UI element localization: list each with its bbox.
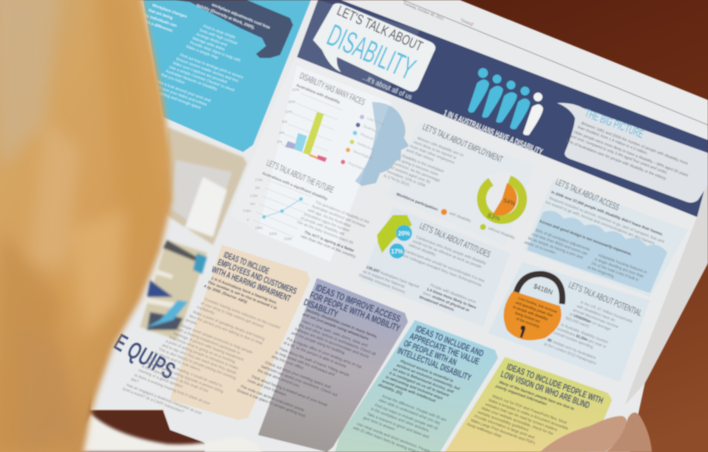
hearing panel body: 4 by 2050. (Source: ABS)	[202, 283, 249, 305]
intellectual panel tips: often able to understand what you say.	[378, 397, 442, 426]
employment text: Women with disability are no	[417, 135, 465, 158]
masthead date line: Tuesday, October 30, 2012	[403, 1, 444, 21]
future panel text: with age. As the Australian	[307, 207, 352, 228]
line chart: 0	[247, 218, 249, 222]
chart legend: Low Vision	[367, 116, 384, 126]
bar chart	[277, 88, 342, 162]
panel: intellectual disability ideas	[335, 320, 498, 452]
icon: face silhouette	[355, 102, 409, 186]
mobility panel tips: lifts and other options to workstations. Check all	[298, 322, 377, 356]
potential text: contributes $1.5bn per year or	[557, 326, 607, 349]
hearing panel tips: site?	[130, 376, 140, 384]
hearing panel tips: with a hearing impairment participate in	[176, 326, 241, 355]
keyhole	[520, 326, 525, 338]
mobility panel lead: Mobility disabilities come in many forms,	[306, 307, 378, 339]
left cyan panel body text: fonts with high contrast	[199, 27, 239, 46]
access left column: cost less than $500 and some can	[531, 231, 588, 256]
tagline: ...it's about all of us	[361, 73, 414, 102]
employment text: common. As the percentage	[394, 161, 441, 183]
low vision panel tips: website accessibility guidelines	[477, 409, 529, 432]
photo: table and blue chairs	[140, 240, 207, 340]
attitudes violence note: threatened violence.	[419, 294, 456, 312]
attitudes support note: 135,637 Australians have signed	[366, 264, 420, 289]
dark speech bubble text: workplace adjustments cost less	[210, 1, 272, 30]
stat circle 17 percent: 17%	[391, 250, 404, 256]
intellectual panel tips: Find out ways to include people with ID	[374, 402, 439, 431]
big picture speech bubble	[557, 103, 708, 203]
shirt	[70, 413, 263, 452]
left cyan panel body text: Ensure screen reader access and text	[176, 56, 240, 83]
potential text: annual discretionary income	[572, 307, 619, 329]
panel: access	[524, 177, 688, 297]
mobility panel heading: DISABILITY	[302, 297, 340, 321]
hearing panel tips: If someone is lip reading, it could be useful to	[149, 356, 223, 388]
stat circle 20 percent: 20%	[398, 232, 411, 238]
panel: low vision ideas	[445, 357, 612, 452]
hearing panel tips: face the person you are talking to due to hear	[189, 313, 264, 346]
mobility panel heading: FOR PEOPLE WITH A MOBILITY	[308, 290, 402, 335]
chart legend	[341, 115, 384, 172]
donut chart: workforce participation	[477, 172, 527, 224]
intellectual panel tips: in the workplace and other activities.	[370, 406, 431, 433]
mobility panel tips: Put a regular office in your seating area on top	[286, 336, 363, 369]
future panel bold note: The ACT is ageing at a faster	[304, 229, 356, 253]
big picture text: than doubled, from 1.9 million to 4.0 million.	[577, 124, 649, 156]
future chart subtitle: Australians with a significant disability	[262, 171, 329, 201]
line chart: 1981	[255, 226, 263, 230]
sink basin	[185, 177, 227, 237]
hearing panel tips: of your shop to help visitors get around	[200, 300, 264, 329]
intellectual panel heading: APPRECIATE THE VALUE	[408, 331, 481, 367]
header banner	[297, 0, 708, 217]
access left column: 50% of all workplace adjustments	[535, 227, 591, 252]
masthead date line	[403, 0, 708, 125]
intellectual panel body: it is contingent on us all to behave	[389, 370, 451, 398]
title: disability: DISABILITY	[322, 17, 420, 87]
attitudes text: Canberrans who would be uncomfortable if a new	[404, 248, 486, 283]
mobility panel tips: to help assist with the entryways and	[275, 350, 336, 377]
future panel text: population ages the number	[304, 211, 351, 233]
mobility panel tips: of a lift, so the person is able to access	[283, 340, 347, 369]
line chart: 1.5m	[250, 194, 258, 198]
mobility panel tips: hallways are wide to accommodate and doors	[294, 326, 370, 359]
employment text: of workers aged over 50	[390, 165, 432, 185]
chart legend: Physical	[360, 132, 374, 141]
chart legend: Intellectual	[357, 141, 374, 151]
access right column: a single dwelling are less than	[594, 256, 645, 279]
intellectual panel tips: Know the difference. People with ID are	[382, 393, 447, 422]
attitudes violence note: 1.4 times more likely to have	[426, 286, 478, 310]
hearing panel tips: may know what is going on as a meeting.	[169, 334, 237, 364]
heading: potential: LET'S TALK ABOUT POTENTIAL	[567, 280, 643, 318]
mobility panel lead: and not just people using wheelchairs	[302, 311, 370, 341]
padlock text: and spending power due	[515, 301, 553, 318]
potential text: In Australia, disability tourism	[560, 322, 609, 344]
employment text: is going to become more	[398, 157, 439, 177]
attitudes text: could not be as effective at work as people	[412, 238, 482, 269]
chart legend: Psychiatric	[348, 161, 365, 172]
axis labels: 20%	[292, 88, 300, 92]
employment text: to 17% by 2015.	[383, 173, 411, 187]
hearing panel tips: have that person sitting opposite a person doing	[145, 359, 224, 394]
low vision panel body: poorly organised information	[494, 383, 548, 407]
mobility panel heading: IDEAS TO IMPROVE ACCESS	[314, 283, 402, 325]
panel: employment	[383, 122, 535, 245]
future panel bold note: rate than the rest of the country	[300, 233, 357, 259]
crease highlight over fold	[230, 57, 395, 262]
axis labels	[277, 88, 300, 144]
icon: Australia map	[377, 215, 412, 253]
potential text: at the London 2012 Paralympics	[543, 341, 597, 366]
line chart: 2003	[269, 232, 277, 236]
dark speech bubble	[175, 0, 293, 58]
left cyan panel body text: Manage wide aisles	[192, 35, 226, 52]
access bold lead: In 2009 over 37,000 people with disability didn't leave their homes.	[551, 190, 664, 237]
hearing panel tips: a bit of speaking, such as the chair of the	[141, 363, 209, 393]
intellectual panel body: in welcoming and inclusive ways	[385, 374, 445, 401]
hearing panel tips: Make a point of speaking clearly and looking	[192, 309, 266, 341]
heading: attitudes: LET'S TALK ABOUT ATTITUDES	[418, 221, 492, 260]
hearing panel tips: by phone and to note takers.	[154, 350, 202, 372]
mobility panel tips: the clear area around you.	[257, 368, 301, 388]
left cyan panel body text: Provide clear signs to help with	[189, 40, 241, 63]
access right column: Adaptable housing features in	[598, 252, 648, 275]
left cyan panel body text: Find out how to arrange print or screen	[179, 52, 244, 80]
stat circle 20 percent	[396, 225, 412, 241]
attitudes text: Canberrans who think people with disability	[416, 234, 487, 266]
intellectual panel body: around people with intellectual	[381, 378, 437, 403]
employment text: Disability in the workplace	[401, 153, 445, 174]
axis labels: 16%	[288, 100, 296, 104]
heading: access: LET'S TALK ABOUT ACCESS	[554, 177, 621, 212]
panel: potential	[488, 262, 650, 382]
workforce legend	[396, 191, 516, 240]
chart subtitle: Australians with disability	[296, 83, 341, 105]
attitudes support note: Disability Insurance Scheme.	[358, 272, 407, 295]
hair strands	[0, 0, 158, 452]
panel: left cyan tips	[140, 0, 311, 152]
left cyan panel body text: Arrange desks and	[195, 31, 228, 47]
hearing panel body: 1 in 6 Australians have a hearing loss.	[211, 275, 278, 305]
left cyan column text: by individuals can	[144, 12, 178, 28]
hearing panel tips: fund a event? Or a CART transcriber?	[122, 386, 186, 414]
potential text: In the US, 57 million households	[580, 299, 634, 324]
axis labels: 12%	[285, 110, 293, 114]
panel: attitudes	[358, 207, 510, 327]
panel: hearing impairment ideas	[122, 245, 310, 436]
left cyan panel body text: Make a simple map	[186, 44, 219, 60]
employment text: work than others.	[406, 147, 435, 162]
intellectual panel heading: INTELLECTUAL DISABILITY	[396, 346, 473, 383]
intellectual panel body: Physical access is essential to	[400, 358, 455, 383]
hearing panel heading: EMPLOYEES AND CUSTOMERS	[216, 257, 298, 296]
mobility panel tips: Ensure a low place for people getting food.	[236, 388, 307, 419]
access left column: paper on a counter.	[524, 239, 557, 255]
low vision panel heading: IDEAS TO INCLUDE PEOPLE WITH	[505, 361, 605, 406]
low vision panel tips: Keep walkways clear	[467, 421, 503, 439]
axis labels: 0%	[277, 140, 283, 144]
attitudes text: work colleague revealed they have Schizophrenia.	[400, 252, 483, 288]
donut chart: workforce participation: 54%	[502, 198, 516, 208]
potential text: $20,000 each)	[565, 315, 591, 329]
stat circle 17 percent	[390, 244, 404, 258]
mobility panel tips: room and your hallways.	[247, 378, 288, 397]
line chart: 2.5m	[255, 178, 263, 182]
employment text: more than other employees	[409, 143, 455, 165]
big picture text: Between 1981 and 2009 the number of people with disability more	[581, 120, 689, 166]
access right column: 1% of the total costs if built in	[590, 260, 640, 282]
dark speech bubble text: quickly (Diversity at Work, 2005).	[196, 2, 256, 30]
line chart: 0.5m	[243, 209, 251, 213]
low vision panel tips: Provide information in large print and	[474, 413, 535, 440]
workforce legend: without disability	[488, 225, 516, 240]
padlock text: Lost income, lost revenue	[518, 296, 558, 314]
heading: employment: LET'S TALK ABOUT EMPLOYMENT	[421, 122, 505, 165]
attitudes violence note: been victims of physical or	[422, 290, 470, 313]
intellectual panel heading: IDEAS TO INCLUDE AND	[414, 324, 485, 359]
access intro text: Reasons included no access, nowhere to go, lack of transport, fear and	[549, 195, 665, 244]
heading: the big picture: THE BIG PICTURE	[583, 108, 645, 141]
intellectual panel tips: give time to answer.	[363, 415, 397, 432]
left cyan panel body text: make sure your aisles and entries	[151, 82, 208, 107]
dark table under paper corner	[90, 411, 205, 452]
mobility panel tips: step into your office.	[271, 354, 305, 371]
employment text: increases: 10% in 1998	[387, 169, 426, 188]
mobility panel tips: Think about the path of travel. Fitting ramps	[278, 346, 350, 377]
fold highlight on banner	[297, 0, 420, 95]
hearing panel tips: meetings. A person with hearing impairment	[172, 330, 245, 362]
big picture text: and over, compared to only 3.4% aged four years and under.	[569, 133, 669, 175]
big picture text: 17% of Australians care for people with disability or the elderly.	[565, 138, 668, 181]
low vision panel tips: Watch out for PDF and PowerPoint files. Most	[492, 393, 568, 425]
left cyan panel body text: Print in clear simple	[203, 23, 236, 40]
mobility panel tips: Have a clear path, wide doors, clear and	[302, 318, 368, 348]
future panel text: of people with disability will	[300, 215, 345, 236]
hearing panel tips: Consider having some induction on the counter	[204, 296, 282, 330]
left cyan column text: Workplace changes	[152, 2, 188, 19]
paper right margin	[625, 180, 708, 405]
mobility panel tips: with the people using for building.	[291, 330, 346, 355]
intellectual panel heading: OF PEOPLE WITH AN	[402, 338, 458, 368]
chart legend: Neurological	[353, 149, 373, 160]
mobility panel tips: bathroom can assist your workforce. Check out	[261, 364, 339, 398]
icon: padlock: $41BN	[532, 283, 554, 297]
hand holding paper	[540, 412, 652, 452]
line chart: 1m	[250, 202, 255, 206]
employment text: more likely to be injured or	[413, 139, 458, 160]
low vision panel heading: LOW VISION OR WHO ARE BLIND	[499, 369, 591, 411]
big picture text: Older people were more likely to have a disability – 88% aged 90 years	[573, 129, 689, 178]
axis labels: 8%	[282, 120, 288, 124]
attitudes text: without disability.	[408, 242, 437, 257]
potential text: of US$200bn (or average	[569, 311, 612, 332]
workforce legend: with disability	[449, 210, 472, 223]
blurred hair	[0, 0, 172, 452]
heading: disability has many faces: DISABILITY HAS MANY FACES	[298, 71, 367, 107]
potential text: with disabilities have an	[576, 303, 616, 323]
hearing panel tips: a point of asking people to introduce to make	[165, 338, 239, 371]
padlock text: to people with disability	[512, 305, 549, 321]
padlock text: being locked out	[514, 311, 540, 324]
hearing panel tips: Has an engaged a deafness interpreter at your	[126, 382, 203, 416]
potential text: overall tourism spending	[553, 330, 594, 350]
access right column: at the beginning.	[587, 264, 616, 279]
low vision panel tips: Make your website accessible, check for the	[481, 405, 554, 436]
left cyan column text: that are being	[148, 7, 174, 20]
left cyan panel body text: Take a look around your work and	[155, 78, 212, 103]
mobility panel tips: Fire exits can access evacuation points	[240, 384, 305, 413]
left cyan panel body text: Use a simple Contrast Checker to check	[169, 64, 236, 93]
left cyan panel body text: that you follow	[161, 72, 186, 85]
wavy blue access band	[527, 211, 667, 293]
potential text: 85 medals won by Australians	[547, 337, 597, 360]
masthead date line: Times2	[460, 17, 475, 27]
intellectual panel body: so also is Behavioural Access, and	[392, 366, 455, 394]
access left column: be as simple as having a pen and	[527, 235, 584, 260]
hearing panel tips: This is also helpful to people joining the meeting	[158, 346, 237, 380]
panel: future chart	[243, 158, 370, 259]
icon: padlock	[504, 274, 562, 340]
bars	[285, 141, 296, 149]
access band text: Access and good design is not necessarily expensive.	[539, 219, 632, 257]
intellectual panel body: achieve an inclusive community, but	[396, 362, 461, 391]
headline fragment: QUIPS: E QUIPS	[109, 329, 180, 385]
mobility panel tips: Check out ways your meeting space and	[264, 360, 332, 389]
intellectual panel tips: Take a moment to greet and listen and	[366, 411, 430, 439]
access intro text: too scared to go with. Access and communications are also barriers.	[545, 199, 656, 246]
line chart: 2030	[284, 237, 292, 241]
icon: five people	[468, 68, 543, 135]
future panel text: Australian workforce will increase	[311, 203, 366, 229]
low vision panel tips: Make Large Print documents and PDFs	[470, 417, 536, 445]
left cyan panel body text: Make sure Captions are provided	[172, 60, 228, 84]
future panel text: rise as the baby boomers reach 65	[296, 219, 354, 245]
donut chart: workforce participation: 83%	[486, 212, 501, 223]
line chart	[243, 178, 312, 241]
panel: mobility disability ideas	[236, 278, 408, 452]
future panel text: The prevalence of disability in the	[315, 199, 370, 225]
hearing panel body: This number is set to rise to around 1 in	[207, 279, 278, 311]
low vision panel tips: Make a template to make a document accessible	[488, 397, 569, 431]
photo: bathroom sink	[163, 127, 247, 245]
hearing panel tips: confidently.	[196, 304, 216, 316]
padlock text: of the economy	[516, 317, 540, 329]
axis labels: 4%	[279, 131, 285, 135]
hearing panel heading: WITH A HEARING IMPAIRMENT	[210, 264, 293, 304]
chart legend: Deaf/Hard	[363, 124, 379, 134]
hearing panel tips: Is there a working hearing loop in place at your	[134, 372, 212, 406]
hearing panel tips: and to say who they are each time they speak.	[161, 342, 238, 376]
panel: many faces chart area	[258, 66, 409, 262]
line chart: 2m	[255, 186, 260, 190]
low vision panel body: Many of the barriers people face are due to	[499, 379, 576, 411]
left cyan panel body text: Australian Network on Disability	[165, 68, 218, 92]
workforce legend: Workforce participation:	[396, 191, 439, 212]
title: let's talk about: LET'S TALK ABOUT	[335, 2, 426, 54]
mobility panel tips: Think about having a seated area of your break	[250, 374, 328, 407]
hearing panel heading: IDEAS TO INCLUDE	[222, 250, 271, 276]
low vision panel tips: websites that can be read by screen readers	[484, 401, 558, 432]
hearing panel tips: meeting or a guest speaker.	[138, 367, 184, 389]
intellectual panel body: disability. (ID)	[378, 382, 404, 396]
attitudes violence note: People with disabilities were	[430, 282, 477, 304]
left cyan panel body text: Clear lighting and enough space	[148, 86, 202, 110]
attitudes support note: up to support the National	[362, 268, 405, 289]
hearing panel tips: people.	[185, 317, 199, 326]
left cyan column text: make a difference:	[140, 17, 174, 33]
hearing panel tips: Simple some simple protocols to help people	[180, 322, 254, 355]
statistic caption: 1 IN 5 AUSTRALIANS HAVE A DISABILITY	[442, 108, 544, 157]
title speech bubble	[313, 2, 435, 92]
heading: the future: LET'S TALK ABOUT THE FUTURE	[265, 158, 335, 195]
